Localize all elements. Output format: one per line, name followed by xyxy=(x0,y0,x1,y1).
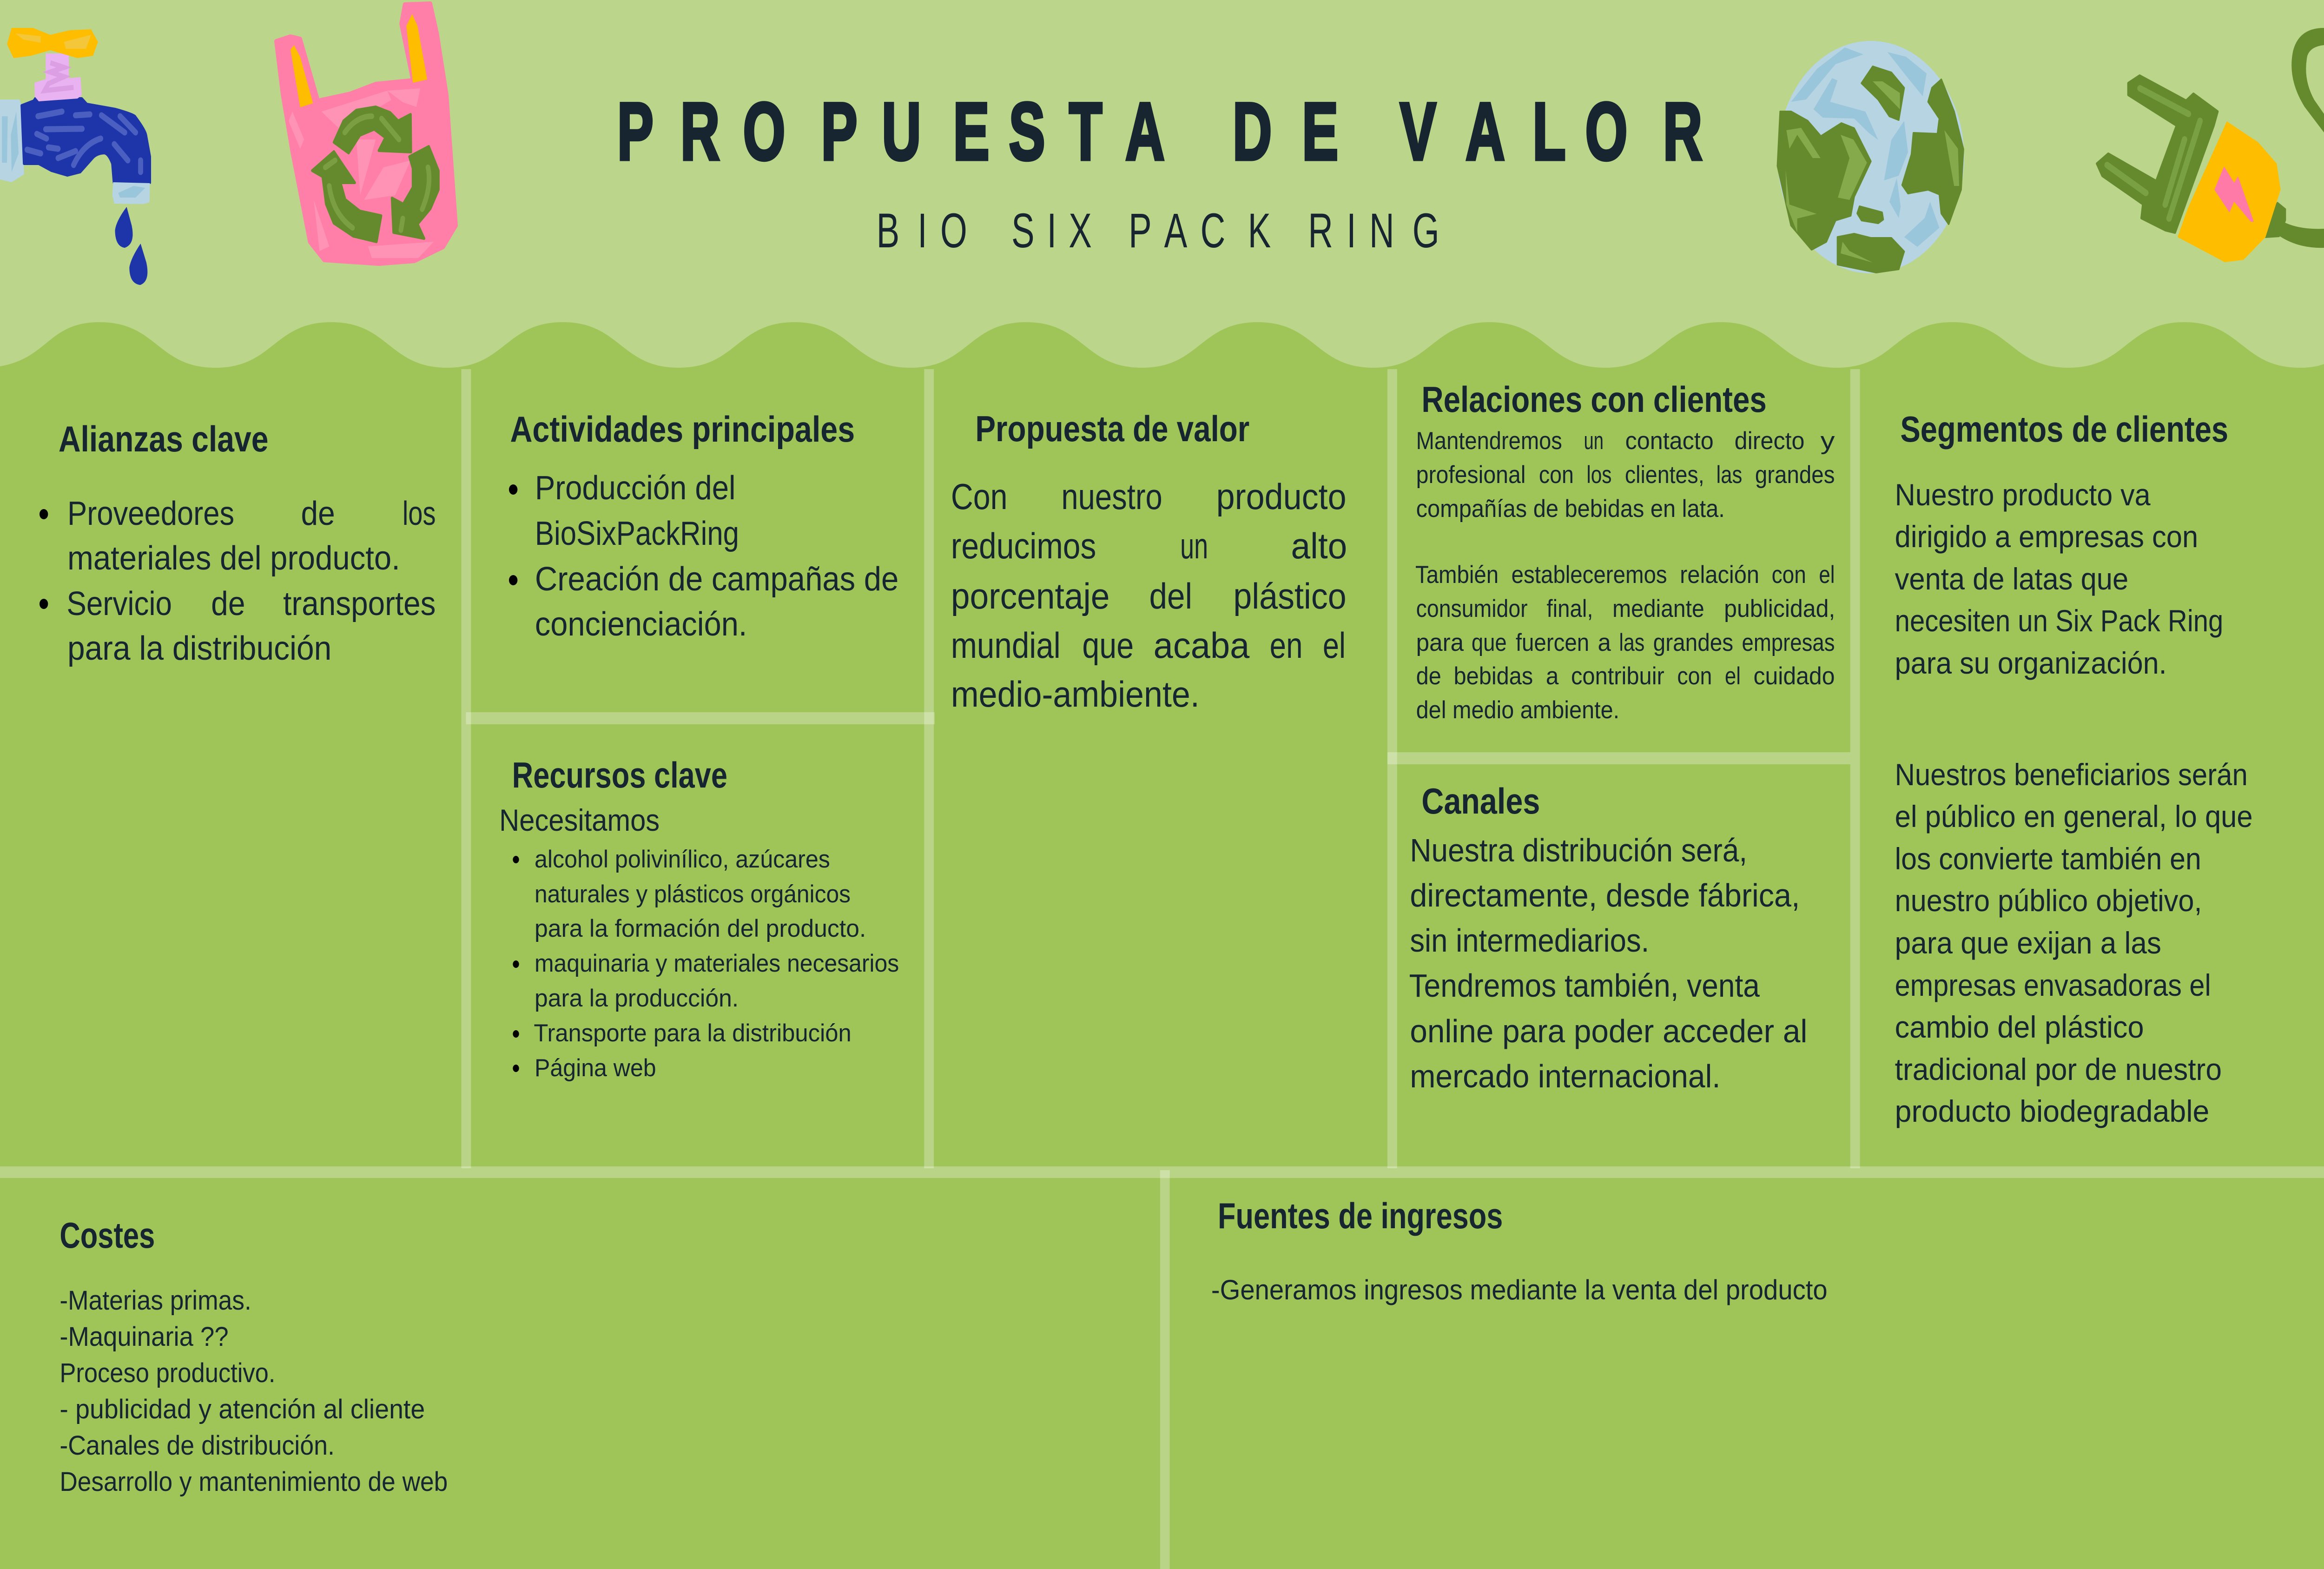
body text: beneficiarios: producto biodegradable xyxy=(1895,1094,2209,1128)
list: recursos: Página web xyxy=(535,1054,656,1082)
heading: segmentos de clientes: Segmentos de clientes xyxy=(1900,409,2228,450)
body text: propuesta de valor: un xyxy=(1180,526,1208,566)
body text: relaciones: grandes xyxy=(1653,629,1733,656)
panel: relaciones con clientes xyxy=(1415,379,1835,724)
list: proveedores y servicio: materiales del producto. xyxy=(67,540,400,577)
body text: beneficiarios: nuestro público objetivo, xyxy=(1895,883,2202,918)
body text: propuesta de valor: alto xyxy=(1291,526,1347,566)
panel: recursos clave xyxy=(499,755,899,1082)
body text: relaciones: un xyxy=(1584,427,1604,455)
body text: relaciones: el xyxy=(1725,662,1741,690)
body text: relaciones: las xyxy=(1716,461,1742,489)
body text: propuesta de valor: que xyxy=(1082,625,1134,666)
list: proveedores y servicio: de xyxy=(211,585,245,622)
body text: fuentes de ingresos: -Generamos ingresos mediante la venta del producto xyxy=(1211,1274,1828,1305)
body text: costes: Proceso productivo. xyxy=(59,1358,275,1388)
icon: water tap xyxy=(0,28,150,285)
body text: dirigido a empresas: necesiten un Six Pack Ring xyxy=(1895,603,2223,638)
body text: relaciones: con xyxy=(1677,662,1712,690)
body text: canales xyxy=(1409,832,1807,1094)
list: recursos: para la producción. xyxy=(535,985,739,1012)
list: recursos xyxy=(513,846,899,1082)
heading: canales: Canales xyxy=(1421,781,1540,821)
list: recursos: alcohol polivinílico, azúcares xyxy=(535,846,830,873)
body text: costes: - publicidad y atención al cliente xyxy=(59,1395,425,1424)
body text: relaciones: mediante xyxy=(1612,595,1704,622)
list: actividades: BioSixPackRing xyxy=(535,515,739,552)
body text: relaciones: el xyxy=(1819,561,1835,589)
body text: propuesta de valor: producto xyxy=(1216,477,1347,517)
body text: dirigido a empresas: dirigido a empresas con xyxy=(1895,519,2198,554)
body text: canales: directamente, desde fábrica, xyxy=(1410,877,1800,914)
list: proveedores y servicio xyxy=(40,495,436,667)
list: proveedores y servicio: los xyxy=(403,495,436,532)
body text: costes xyxy=(59,1286,448,1497)
body text: propuesta de valor: nuestro xyxy=(1061,477,1162,517)
body text: relaciones: para xyxy=(1416,629,1464,656)
icon: pink plastic bag with recycle symbol xyxy=(276,4,456,264)
list: proveedores y servicio: de xyxy=(301,495,335,532)
panel: alianzas clave xyxy=(40,419,436,667)
body text: propuesta de valor: acaba xyxy=(1154,625,1249,666)
body text: canales: mercado internacional. xyxy=(1410,1058,1721,1094)
body text: propuesta de valor: porcentaje xyxy=(951,576,1109,616)
heading: recursos clave: Recursos clave xyxy=(512,755,727,795)
body text: relaciones: fuercen xyxy=(1516,629,1589,656)
body text: beneficiarios: los convierte también en xyxy=(1895,841,2201,876)
intro: necesitamos: Necesitamos xyxy=(499,803,660,837)
body text: relaciones: También xyxy=(1415,561,1499,589)
panel: fuentes de ingresos xyxy=(1211,1196,1828,1305)
list: recursos: maquinaria y materiales necesarios xyxy=(535,950,899,977)
body text: relaciones: publicidad, xyxy=(1724,595,1835,622)
body text: relaciones: del medio ambiente. xyxy=(1416,696,1619,724)
list: recursos: para la formación del producto. xyxy=(535,915,866,942)
body text: dirigido a empresas: venta de latas que xyxy=(1895,562,2128,596)
body text: relaciones: compañías de bebidas en lata. xyxy=(1416,495,1725,523)
body text: propuesta de valor: mundial xyxy=(951,625,1061,666)
body text: propuesta de valor: del xyxy=(1149,576,1192,616)
body text: relaciones: que xyxy=(1472,629,1507,656)
heading: alianzas clave: Alianzas clave xyxy=(59,419,269,459)
body text: relaciones: profesional xyxy=(1416,461,1526,489)
body text: relaciones: relación xyxy=(1680,561,1759,589)
body text: relaciones: de xyxy=(1416,662,1441,690)
body text: canales: online para poder acceder al xyxy=(1410,1013,1807,1049)
body text: relaciones: los xyxy=(1586,461,1612,489)
body text: costes: Desarrollo y mantenimiento de web xyxy=(59,1467,448,1497)
body text: beneficiarios: para que exijan a las xyxy=(1895,926,2161,960)
list: proveedores y servicio: Servicio xyxy=(66,585,172,622)
body text: beneficiarios: el público en general, lo que xyxy=(1895,799,2253,834)
icon: earth globe xyxy=(1777,41,1964,273)
panel: segmentos de clientes xyxy=(1895,409,2253,1128)
heading: fuentes de ingresos: Fuentes de ingresos xyxy=(1218,1196,1503,1236)
list: proveedores y servicio: transportes xyxy=(283,585,436,622)
body text: relaciones: a xyxy=(1546,662,1559,690)
panel: canales xyxy=(1409,781,1807,1094)
list: actividades xyxy=(509,470,898,643)
heading: actividades principales: Actividades principales xyxy=(510,409,855,450)
body text: dirigido a empresas: para su organización. xyxy=(1895,646,2167,680)
heading: costes: Costes xyxy=(59,1215,155,1256)
body text: canales: Nuestra distribución será, xyxy=(1410,832,1747,868)
body text: relaciones: Mantendremos xyxy=(1416,427,1562,455)
list: proveedores y servicio: Proveedores xyxy=(67,495,234,532)
body text: propuesta de valor: plástico xyxy=(1233,576,1347,616)
body text: propuesta de valor xyxy=(951,477,1347,715)
list: actividades: concienciación. xyxy=(535,606,747,643)
heading: relaciones con clientes: Relaciones con clientes xyxy=(1421,379,1767,420)
body text: relaciones: directo xyxy=(1735,427,1805,455)
list: recursos: naturales y plásticos orgánicos xyxy=(535,880,851,908)
body text: relaciones: las xyxy=(1619,629,1644,656)
subtitle: BIO SIX PACK RING xyxy=(877,204,1439,258)
panel: costes xyxy=(59,1215,448,1497)
body text: relaciones: a xyxy=(1598,629,1611,656)
body text: relaciones: estableceremos xyxy=(1512,561,1667,589)
body text: propuesta de valor: medio-ambiente. xyxy=(951,674,1200,715)
body text: costes: -Canales de distribución. xyxy=(59,1431,335,1461)
body text: relaciones: empresas xyxy=(1742,629,1835,656)
list: proveedores y servicio: para la distribución xyxy=(67,630,331,667)
body text: relaciones xyxy=(1415,427,1835,724)
body text: costes: -Maquinaria ?? xyxy=(59,1322,229,1352)
body text: relaciones: cuidado xyxy=(1753,662,1835,690)
icon: electric plug xyxy=(2097,28,2324,262)
list: recursos: Transporte para la distribución xyxy=(534,1020,852,1047)
body text: beneficiarios: cambio del plástico xyxy=(1895,1010,2144,1044)
list: actividades: Creación de campañas de xyxy=(535,561,898,598)
body text: canales: sin intermediarios. xyxy=(1410,922,1649,959)
wavy green body background xyxy=(0,322,2324,1569)
list: actividades: Producción del xyxy=(535,470,736,507)
body text: costes: -Materias primas. xyxy=(59,1286,251,1316)
body text: relaciones: con xyxy=(1772,561,1806,589)
body text: beneficiarios: empresas envasadoras el xyxy=(1895,968,2211,1002)
panel: actividades principales xyxy=(509,409,898,643)
body text: propuesta de valor: en xyxy=(1270,625,1303,666)
body text: relaciones: contacto xyxy=(1625,427,1714,455)
body text: propuesta de valor: Con xyxy=(951,477,1008,517)
body text: beneficiarios xyxy=(1895,757,2253,1128)
title: PROPUESTA DE VALOR xyxy=(617,86,1702,177)
body text: beneficiarios: tradicional por de nuestro xyxy=(1895,1052,2222,1086)
body text: relaciones: grandes xyxy=(1755,461,1835,489)
body text: propuesta de valor: reducimos xyxy=(951,526,1096,566)
body text: beneficiarios: Nuestros beneficiarios serán xyxy=(1895,757,2248,792)
body text: dirigido a empresas xyxy=(1895,477,2223,680)
body text: relaciones: contribuir xyxy=(1571,662,1664,690)
body text: relaciones: bebidas xyxy=(1454,662,1533,690)
body text: relaciones: consumidor xyxy=(1416,595,1528,622)
body text: relaciones: con xyxy=(1539,461,1574,489)
body text: relaciones: y xyxy=(1821,427,1835,455)
body text: propuesta de valor: el xyxy=(1323,625,1346,666)
body text: canales: Tendremos también, venta xyxy=(1409,967,1760,1004)
body text: relaciones: final, xyxy=(1547,595,1593,622)
heading: propuesta de valor: Propuesta de valor xyxy=(975,409,1249,449)
body text: relaciones: clientes, xyxy=(1625,461,1704,489)
panel: propuesta de valor xyxy=(951,409,1347,715)
body text: dirigido a empresas: Nuestro producto va xyxy=(1895,477,2151,512)
